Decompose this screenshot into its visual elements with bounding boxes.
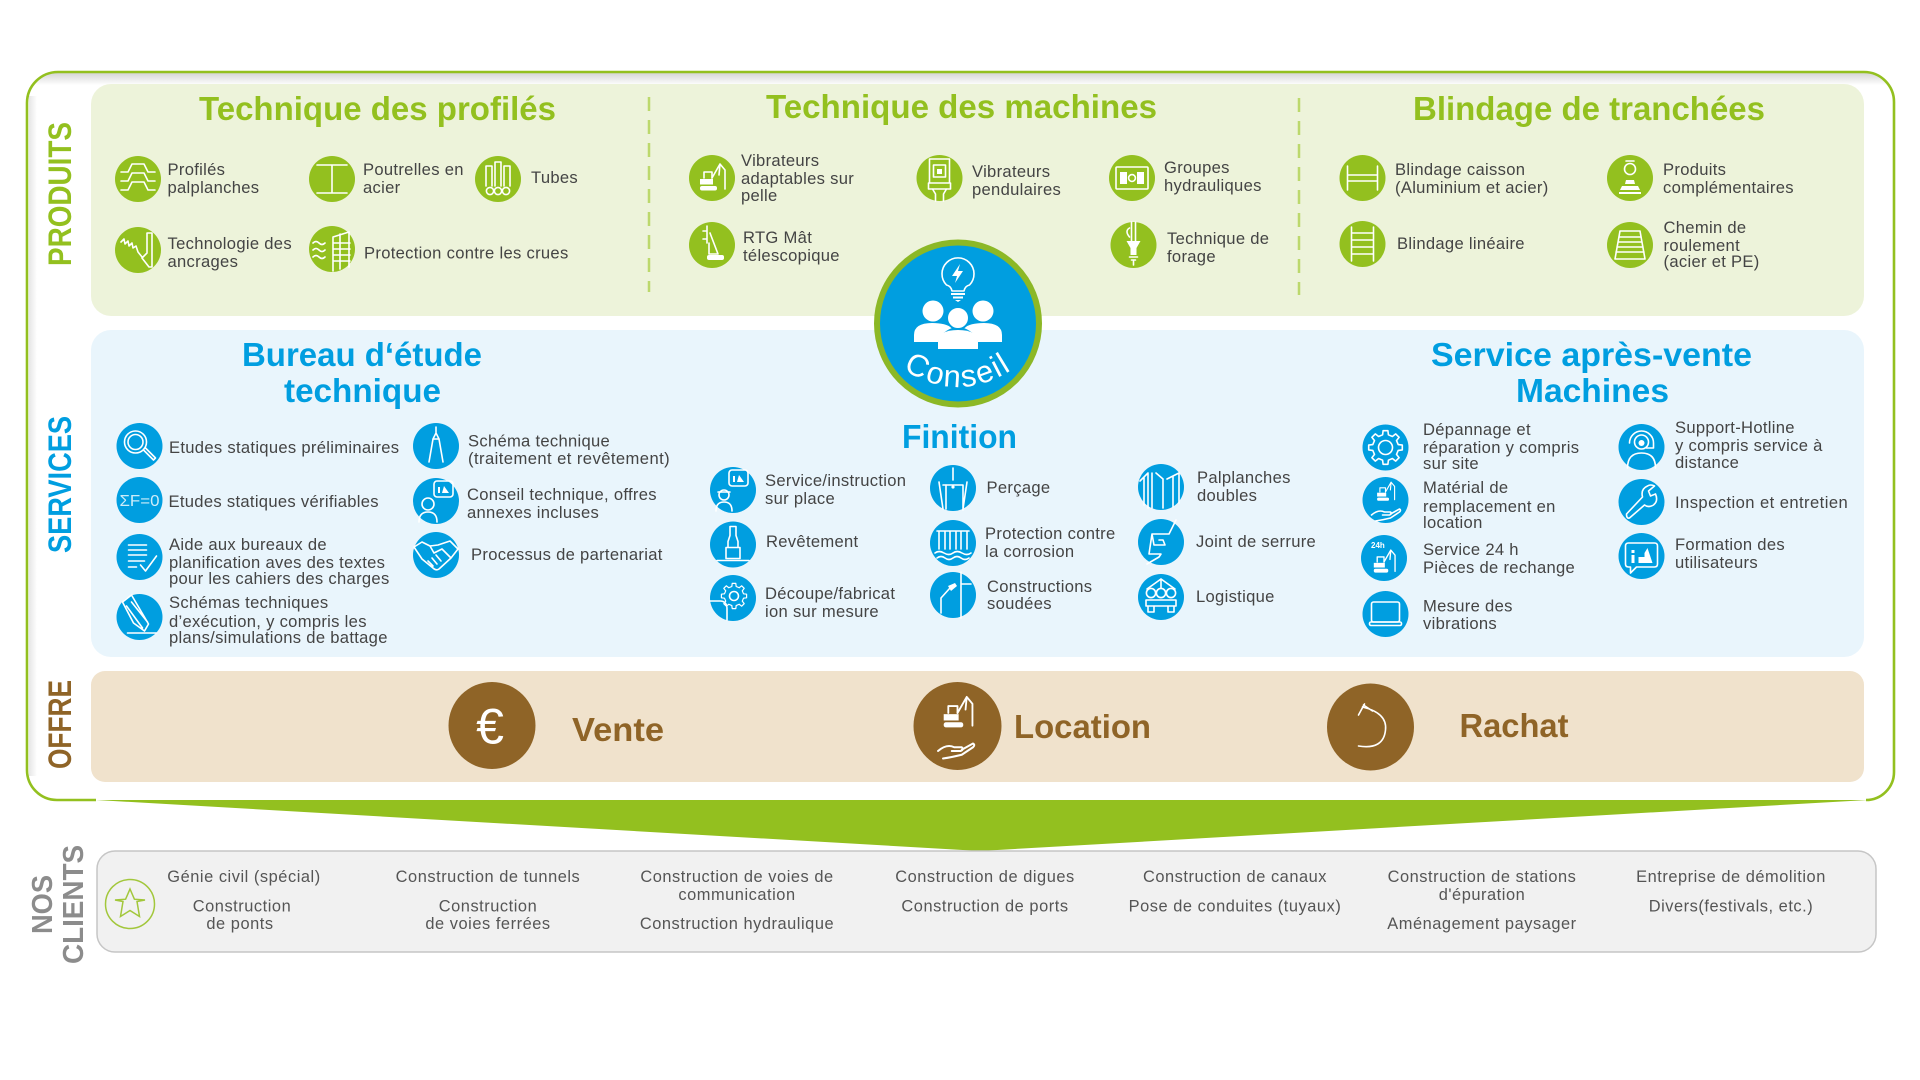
client column 2: Construction <box>439 898 537 916</box>
item: Blindage caisson <box>1340 155 1549 201</box>
panel: produits <box>42 84 1864 316</box>
icon: cutting <box>710 575 756 621</box>
icon: crues <box>309 226 355 272</box>
icon: ancrages <box>115 227 161 273</box>
label: Constructions soudées: Constructions <box>987 577 1092 596</box>
heading: Finition: Finition <box>902 418 1017 455</box>
label: Schéma technique: (traitement et revêtement) <box>468 449 670 468</box>
icon: logistics <box>1138 574 1184 620</box>
background: produits <box>91 84 1864 316</box>
label: Palplanches doubles: Palplanches <box>1197 468 1291 487</box>
item: Vente <box>448 682 664 769</box>
label: Produits complémentaires: complémentaires <box>1663 178 1794 197</box>
label: Location: Location <box>1014 708 1151 745</box>
label: Groupes hydrauliques: hydrauliques <box>1164 176 1262 195</box>
icon: 24h service <box>1361 535 1407 581</box>
label: Service 24 h Pièces de rechange: Service 24 h <box>1423 540 1519 559</box>
client column 4: Construction de digues <box>895 868 1075 886</box>
label: Découpe/fabrication sur mesure: ion sur mesure <box>765 602 879 621</box>
label: Perçage: Perçage <box>986 478 1050 497</box>
icon: poutrelle <box>309 156 355 202</box>
panel: offre <box>42 671 1864 782</box>
icon: box shoring <box>1340 155 1386 201</box>
label: Constructions soudées: soudées <box>987 594 1052 613</box>
label: Blindage caisson: (Aluminium et acier) <box>1395 178 1549 197</box>
client column 7: Divers(festivals, etc.) <box>1649 898 1813 916</box>
icon: star <box>106 880 154 928</box>
label: Schéma technique: Schéma technique <box>468 432 610 450</box>
heading: Blindage de tranchées: Blindage de tranchées <box>1413 90 1765 127</box>
label: Produits complémentaires: Produits <box>1663 160 1726 179</box>
label: Chemin de roulement: Chemin de <box>1664 218 1746 237</box>
item: Découpe/fabrication sur mesure <box>710 575 895 621</box>
white frame background <box>27 72 1894 800</box>
icon: accessories <box>1607 155 1653 201</box>
item: Protection contre la corrosion <box>930 520 1116 566</box>
label: Chemin de roulement: roulement <box>1664 236 1740 255</box>
label: Dépannage et réparation: Dépannage et <box>1423 420 1531 439</box>
label: Etudes statiques préliminaires: Etudes statiques préliminaires <box>169 438 399 457</box>
icon: tubes <box>475 156 521 202</box>
label: Schémas techniques d'exécution: Schémas techniques <box>169 593 328 612</box>
label: Découpe/fabrication sur mesure: Découpe/fabricat <box>765 584 895 603</box>
label: Support-Hotline: distance <box>1675 453 1739 472</box>
label: Technique de forage: forage <box>1167 247 1216 266</box>
item: RTG Mât télescopique <box>689 222 840 268</box>
icon: people <box>914 300 1002 349</box>
label: Conseil technique: Conseil technique, offres <box>467 485 657 504</box>
item: Tubes <box>475 156 578 202</box>
label: Vibrateurs adaptables sur pelle: Vibrateurs <box>741 151 819 170</box>
icon: double sheet piles <box>1138 464 1184 510</box>
side label: SERVICES: SERVICES <box>42 416 78 553</box>
label: Groupes hydrauliques: Groupes <box>1164 158 1230 177</box>
icon: interlock <box>1138 519 1184 565</box>
icon: palplanches <box>115 156 161 202</box>
label: Formation des utilisateurs: utilisateurs <box>1675 553 1758 572</box>
funnel arrow to clients <box>96 800 1868 851</box>
side label: NOS CLIENTS: CLIENTS <box>58 845 90 964</box>
client column 1: Génie civil (spécial) <box>167 868 321 886</box>
label: Matérial de remplacement en location: remplacement en <box>1423 497 1556 516</box>
icon: drilling <box>930 465 976 511</box>
label: Revêtement: Revêtement <box>766 532 859 551</box>
label: Service/instruction sur place: sur place <box>765 489 835 508</box>
panel: services <box>42 330 1864 657</box>
icon: laptop <box>1362 591 1408 637</box>
client column 5: Pose de conduites (tuyaux) <box>1129 898 1341 916</box>
label: Aide aux bureaux de planification: pour les cahiers des charges <box>169 569 390 588</box>
client column 6: d'épuration <box>1439 886 1525 904</box>
icon: wrench <box>1618 479 1664 525</box>
label: Aide aux bureaux de planification: planification aves des textes <box>169 553 385 572</box>
icon: linear shoring <box>1340 221 1386 267</box>
item: Constructions soudées <box>930 572 1092 618</box>
item: Dépannage et réparation <box>1362 420 1579 473</box>
label: Formation des utilisateurs: Formation des <box>1675 535 1785 554</box>
icon: roadway <box>1607 222 1653 268</box>
icon: compass <box>413 423 459 469</box>
item: Etudes statiques préliminaires <box>116 423 399 469</box>
side label: NOS CLIENTS: NOS <box>27 875 59 934</box>
heading: Bureau d'étude technique: technique <box>284 372 441 409</box>
label: Logistique: Logistique <box>1196 587 1275 606</box>
label: Matérial de remplacement en location: Matérial de <box>1423 478 1508 497</box>
item: Support-Hotline <box>1618 418 1823 472</box>
label: Matérial de remplacement en location: location <box>1423 513 1483 532</box>
outer green frame <box>27 72 1894 800</box>
icon: euro <box>448 682 536 769</box>
label: Profilés palplanches: Profilés <box>168 160 225 179</box>
client column 3: communication <box>678 886 796 904</box>
item: Produits complémentaires <box>1607 155 1794 201</box>
label: Etudes statiques vérifiables: Etudes statiques vérifiables <box>168 492 379 511</box>
item: Chemin de roulement <box>1607 218 1760 271</box>
item: Schéma technique <box>413 423 670 469</box>
item: Blindage linéaire <box>1340 221 1525 267</box>
label: RTG Mât télescopique: RTG Mât <box>743 228 812 247</box>
background: offre <box>91 671 1864 782</box>
label: Technologie des ancrages: Technologie des <box>168 234 292 253</box>
heading: Service après-vente Machines: Service après-vente <box>1431 336 1752 373</box>
label: Vibrateurs pendulaires: Vibrateurs <box>972 162 1050 181</box>
label: Protection contre les crues: Protection contre les crues <box>364 244 569 262</box>
label: Technologie des ancrages: ancrages <box>168 252 238 271</box>
label: Rachat: Rachat <box>1460 707 1569 744</box>
icon: hydraulic unit <box>1109 155 1155 201</box>
item: Vibrateurs pendulaires <box>916 155 1061 201</box>
client column 3: Construction hydraulique <box>640 915 834 933</box>
label: Poutrelles en acier: acier <box>363 178 401 197</box>
item: Aide aux bureaux de planification <box>116 534 390 588</box>
label: Palplanches doubles: doubles <box>1197 486 1257 505</box>
icon: checklist <box>116 534 162 580</box>
client column 2: de voies ferrées <box>425 915 551 933</box>
icon: gear <box>1362 424 1408 470</box>
item: Processus de partenariat <box>413 532 663 578</box>
label: Joint de serrure: Joint de serrure <box>1196 532 1316 551</box>
label: Mesure des vibrations: Mesure des <box>1423 596 1513 616</box>
client column 6: Construction de stations <box>1388 868 1576 886</box>
client column 5: Construction de canaux <box>1143 868 1327 886</box>
icon: corrosion <box>930 520 976 566</box>
icon: euro: € <box>476 698 504 754</box>
item: Service/instruction sur place <box>710 467 906 513</box>
label: Processus de partenariat: Processus de partenariat <box>471 545 663 564</box>
label: Schémas techniques d'exécution: d’exécution, y compris les <box>169 612 367 631</box>
icon: paint brush <box>710 522 756 568</box>
icon: drill <box>1110 222 1156 268</box>
label: Service 24 h Pièces de rechange: Pièces de rechange <box>1423 558 1575 577</box>
label: Tubes: Tubes <box>531 168 578 187</box>
item: Inspection et entretien <box>1618 479 1848 525</box>
item: Matérial de remplacement en location <box>1362 477 1556 532</box>
icon: training bubble <box>1618 533 1664 579</box>
label: Vibrateurs adaptables sur pelle: adaptables sur <box>741 169 854 188</box>
client column 6: Aménagement paysager <box>1387 915 1577 933</box>
client column 1: de ponts <box>206 915 274 933</box>
icon: pendulum vibrator <box>916 155 962 201</box>
item: Perçage <box>930 465 1050 511</box>
label: Support-Hotline: y compris service à <box>1675 436 1823 455</box>
item: Logistique <box>1138 574 1275 620</box>
item: Technologie des ancrages <box>115 227 292 273</box>
item: Etudes statiques vérifiables <box>116 477 379 523</box>
side label: OFFRE: OFFRE <box>42 680 78 769</box>
item: Mesure des vibrations <box>1362 591 1513 637</box>
client column 2: Construction de tunnels <box>396 868 580 886</box>
icon: pen <box>116 594 162 640</box>
label: Conseil: Conseil <box>908 352 1010 388</box>
item: Schémas techniques d'exécution <box>116 593 388 647</box>
item: Profilés palplanches <box>115 156 259 202</box>
background: clients <box>97 851 1876 952</box>
icon: advisor <box>413 478 459 524</box>
label: Protection contre la corrosion: Protection contre <box>985 524 1116 543</box>
label: Blindage linéaire: Blindage linéaire <box>1397 234 1525 253</box>
heading: Bureau d'étude technique: Bureau d‘étude <box>242 336 482 373</box>
side label: NOS CLIENTS <box>27 845 90 964</box>
panel: clients <box>27 845 1876 964</box>
label: Chemin de roulement: (acier et PE) <box>1664 252 1760 271</box>
label: Mesure des vibrations: vibrations <box>1423 614 1497 633</box>
background: services <box>91 330 1864 657</box>
badge: Conseil <box>874 240 1042 408</box>
icon: headset <box>1618 424 1664 470</box>
icon: 24h service: 24h <box>1371 541 1385 550</box>
label: Blindage caisson: Blindage caisson <box>1395 160 1525 179</box>
label: Support-Hotline: Support-Hotline <box>1675 418 1795 437</box>
heading: Technique des machines: Technique des machines <box>766 88 1157 125</box>
icon: machine on hand <box>1362 477 1408 523</box>
icon: welding <box>930 572 976 618</box>
label: Protection contre la corrosion: la corrosion <box>985 542 1074 561</box>
label: Service/instruction sur place: Service/instruction <box>765 471 906 490</box>
label: Vibrateurs adaptables sur pelle: pelle <box>741 186 778 205</box>
item: Service 24 h Pièces de rechange <box>1361 535 1575 581</box>
label: Vibrateurs pendulaires: pendulaires <box>972 180 1061 199</box>
label: RTG Mât télescopique: télescopique <box>743 246 840 265</box>
item: Rachat <box>1327 684 1569 770</box>
icon: formula: ΣF=0 <box>120 493 160 510</box>
client column 7: Entreprise de démolition <box>1636 868 1826 886</box>
item: Joint de serrure <box>1138 519 1316 565</box>
item: Location <box>914 682 1151 770</box>
icon: light bulb <box>942 258 974 302</box>
label: Aide aux bureaux de planification: Aide aux bureaux de <box>169 535 327 554</box>
label: Schémas techniques d'exécution: plans/simulations de battage <box>169 628 388 647</box>
icon: handshake <box>413 532 459 578</box>
item: Revêtement <box>710 522 859 568</box>
label: Vente: Vente <box>572 711 664 748</box>
label: Conseil technique: annexes incluses <box>467 503 599 522</box>
item: Formation des utilisateurs <box>1618 533 1785 579</box>
heading: Service après-vente Machines: Machines <box>1516 372 1669 409</box>
client column 3: Construction de voies de <box>640 868 834 886</box>
side label: PRODUITS: PRODUITS <box>42 122 78 266</box>
icon: magnifier <box>116 423 162 469</box>
label: Profilés palplanches: palplanches <box>168 178 259 197</box>
label: Inspection et entretien: Inspection et entretien <box>1675 493 1848 512</box>
icon: on-site instruction <box>710 467 756 513</box>
label: Poutrelles en acier: Poutrelles en <box>363 160 464 179</box>
icon: RTG mast <box>689 222 735 268</box>
icon: formula <box>116 477 162 523</box>
item: Groupes hydrauliques <box>1109 155 1262 201</box>
item: Protection contre les crues <box>309 226 569 272</box>
item: Vibrateurs adaptables sur pelle <box>689 151 854 205</box>
item: Palplanches doubles <box>1138 464 1291 510</box>
client column 1: Construction <box>193 898 291 916</box>
icon: machine on hand <box>914 682 1002 770</box>
item: Conseil technique <box>413 478 657 524</box>
label: Technique de forage: Technique de <box>1167 229 1269 248</box>
label: Dépannage et réparation: sur site <box>1423 454 1479 473</box>
item: Technique de forage <box>1110 222 1269 268</box>
heading: Technique des profilés: Technique des profilés <box>199 90 556 127</box>
icon: return arrow <box>1327 684 1414 770</box>
client column 4: Construction de ports <box>901 898 1069 916</box>
item: Poutrelles en acier <box>309 156 464 202</box>
icon: excavator vibrator <box>689 155 735 201</box>
label: Dépannage et réparation: réparation y compris <box>1423 438 1579 457</box>
